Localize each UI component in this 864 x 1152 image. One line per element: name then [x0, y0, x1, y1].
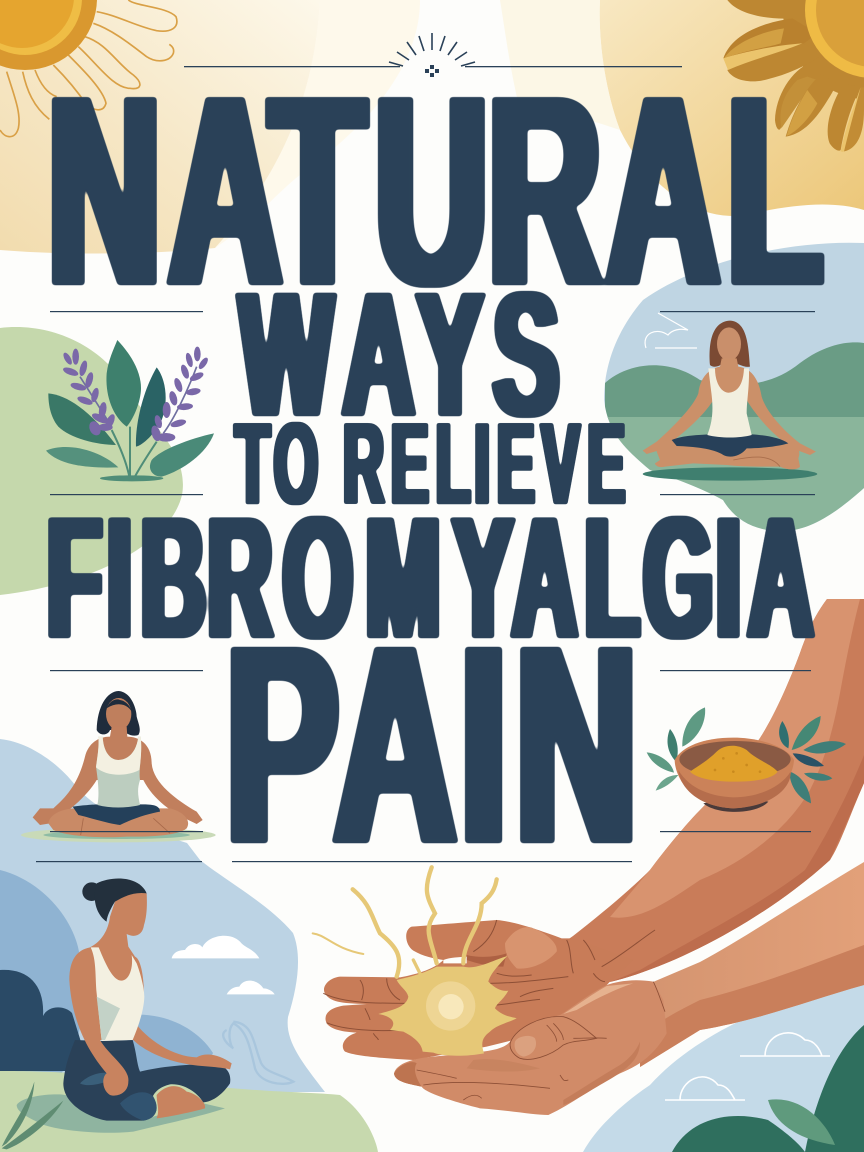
- blob: navy bush: [0, 970, 90, 1071]
- blob: left green: [0, 327, 183, 595]
- top rule left: [184, 66, 400, 67]
- blob: lower right blue: [583, 975, 864, 1152]
- title: WAYS: WAYS: [240, 257, 559, 453]
- lavender plant: [46, 340, 214, 481]
- cloud outline: right scene: [645, 313, 697, 348]
- top rule right: [465, 66, 682, 67]
- title: NATURAL: NATURAL: [48, 39, 823, 341]
- blob: lower left blue: [0, 739, 325, 1092]
- arm: lower: [640, 862, 864, 1067]
- title: PAIN: PAIN: [226, 587, 637, 903]
- background: warm sky top: [0, 0, 864, 254]
- blob: medium blue hill: [130, 1015, 213, 1080]
- sunburst ornament: [389, 33, 475, 77]
- meditating woman: right: [643, 321, 817, 481]
- rules beside title: [36, 311, 815, 862]
- sun: top right: [723, 0, 864, 152]
- hand: lower: [394, 980, 667, 1115]
- seated woman: bottom left: [2, 878, 293, 1149]
- clouds: lower right outline: [665, 1033, 830, 1100]
- arm: upper: [560, 599, 864, 982]
- sun: top left: [0, 0, 177, 137]
- hand: upper: [323, 920, 655, 1060]
- scene: right meditation backdrop: [600, 243, 864, 537]
- glowing sun in hands: [313, 867, 517, 1056]
- blob: ground green: [0, 1071, 378, 1152]
- title: FIBROMYALGIA: FIBROMYALGIA: [47, 483, 813, 675]
- blob: dark blue hills: [0, 870, 83, 1075]
- plant: lower right: [672, 1025, 864, 1152]
- title: TO RELIEVE: TO RELIEVE: [235, 401, 625, 528]
- bowl of turmeric: [647, 707, 846, 812]
- meditating woman: left: [21, 691, 216, 842]
